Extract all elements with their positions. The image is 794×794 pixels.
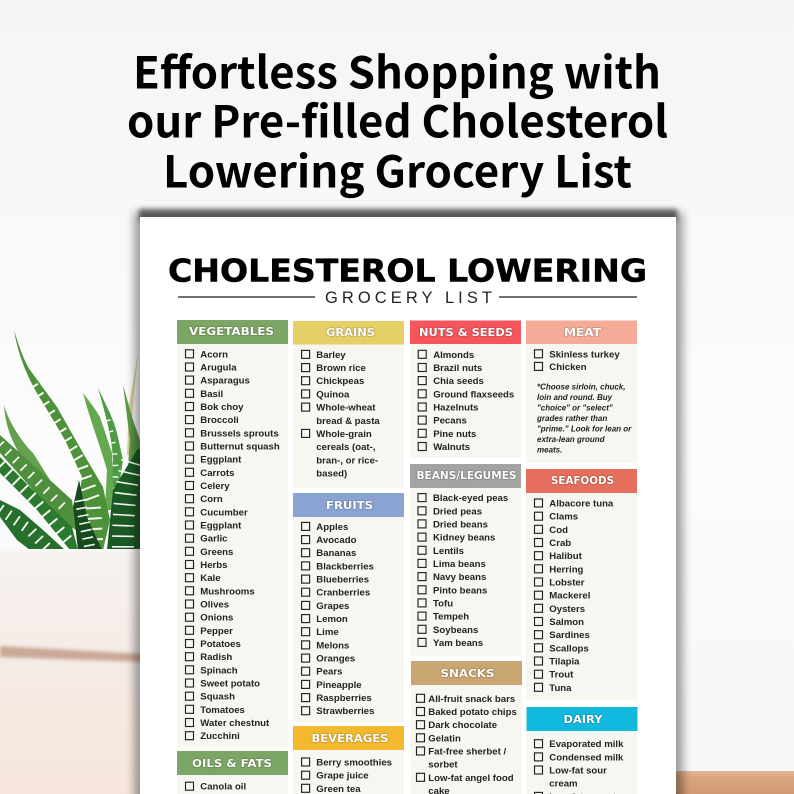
vegetables list: Asparagus — [200, 376, 250, 387]
grains list: bran-, or rice- — [316, 455, 378, 466]
meat buying note: loin and round. Buy — [537, 393, 613, 402]
paper shadow — [134, 209, 683, 794]
vegetables list: Eggplant — [200, 520, 242, 532]
panel: beverages: BEVERAGES — [312, 732, 388, 745]
dairy list: Condensed milk — [549, 752, 624, 763]
panel: oils and fats: OILS & FATS — [192, 757, 272, 770]
fruits list: Pineapple — [316, 680, 362, 691]
nuts list — [418, 350, 514, 453]
vegetables list: Broccoli — [200, 415, 239, 426]
panel: beverages — [293, 726, 404, 794]
seafoods list: Salmon — [549, 617, 584, 628]
vegetables list: Butternut squash — [200, 442, 280, 452]
fruits list: Apples — [316, 522, 348, 533]
seafoods list: Mackerel — [549, 591, 590, 602]
meat buying note: *Choose sirloin, chuck, — [537, 382, 625, 392]
vegetables list: Sweet potato — [200, 678, 260, 690]
fruits list: Avocado — [316, 535, 357, 546]
snacks list: Low-fat angel food — [428, 773, 514, 784]
panel: snacks: SNACKS — [440, 667, 494, 680]
dairy list — [534, 739, 624, 794]
seafoods list: Scallops — [549, 643, 589, 654]
vegetables list: Brussels sprouts — [200, 428, 279, 439]
seafoods list: Trout — [549, 670, 574, 681]
vegetables list: Mushrooms — [200, 586, 255, 597]
beans list: Yam beans — [433, 638, 483, 649]
vegetables list: Garlic — [200, 534, 228, 545]
nuts list: Almonds — [433, 350, 474, 361]
snacks list: Dark chocolate — [428, 720, 497, 731]
panel: oils and fats — [177, 751, 288, 794]
beverages list: Grape juice — [316, 771, 369, 782]
fruits list: Lime — [316, 627, 339, 638]
panel: dairy — [526, 707, 638, 794]
seafoods list: Albacore tuna — [549, 498, 614, 510]
vegetables list: Squash — [200, 692, 235, 703]
vegetables list: Cucumber — [200, 507, 248, 518]
panel: snacks — [411, 661, 522, 794]
vegetables list: Bok choy — [200, 402, 244, 413]
meat list: Skinless turkey — [549, 349, 620, 360]
panel: vegetables: VEGETABLES — [189, 325, 274, 338]
seafoods list — [534, 498, 614, 694]
nuts list: Pecans — [433, 416, 467, 427]
fruits list: Blackberries — [316, 561, 374, 572]
meat list: Chicken — [549, 362, 587, 373]
panel: nuts and seeds: NUTS & SEEDS — [419, 326, 513, 339]
dairy list: Low-fat sour — [549, 766, 607, 776]
grains list: Brown rice — [316, 363, 366, 374]
wooden table — [600, 771, 794, 794]
grains list: Whole-grain — [316, 429, 372, 440]
plant — [0, 330, 140, 550]
vegetables list: Celery — [200, 481, 230, 492]
fruits list: Melons — [316, 640, 349, 651]
nuts list: Hazelnuts — [433, 402, 479, 414]
beans list: Dried peas — [433, 506, 482, 517]
beans list: Lentils — [433, 546, 464, 557]
vegetables list: Kale — [200, 573, 221, 584]
seafoods list: Tuna — [549, 683, 572, 694]
vegetables list: Olives — [200, 600, 229, 610]
panel: seafoods — [526, 469, 637, 700]
vegetables list: Pepper — [200, 626, 233, 637]
meat buying note: extra-lean ground — [537, 435, 606, 444]
vegetables list — [186, 349, 280, 742]
snacks list: All-fruit snack bars — [428, 694, 515, 705]
seafoods list: Lobster — [549, 578, 585, 588]
snacks list: Gelatin — [428, 733, 461, 744]
vegetables list: Acorn — [200, 349, 228, 360]
meat buying note: meats. — [537, 446, 562, 454]
snacks list: sorbet — [428, 760, 458, 771]
beans list: Tempeh — [433, 612, 469, 623]
panel: grains: GRAINS — [326, 326, 375, 339]
fruits list: Strawberries — [316, 706, 374, 717]
fruits list: Raspberries — [316, 693, 372, 704]
seafoods list: Herring — [549, 564, 584, 575]
vegetables list: Arugula — [200, 362, 237, 374]
fruits list: Pears — [316, 667, 342, 678]
panel: meat: MEAT — [564, 326, 602, 339]
nuts list: Ground flaxseeds — [433, 389, 514, 400]
page heading: our Pre-filled Cholesterol — [127, 87, 668, 151]
fruits list: Blueberries — [316, 575, 369, 586]
beans list: Dried beans — [433, 519, 488, 530]
seafoods list: Clams — [549, 512, 578, 523]
vegetables list: Eggplant — [200, 455, 242, 466]
oils list: Canola oil — [200, 782, 246, 793]
vegetables list: Corn — [200, 494, 223, 505]
vegetables list: Greens — [200, 547, 233, 558]
grains list — [302, 350, 380, 479]
beans list: Pinto beans — [433, 585, 487, 596]
beans list: Lima beans — [433, 559, 486, 570]
panel: beans and legumes: BEANS/LEGUMES — [416, 469, 516, 482]
beans list — [418, 493, 508, 649]
panel: beans and legumes — [410, 464, 521, 656]
nuts list: Walnuts — [433, 442, 470, 453]
nuts list: Chia seeds — [433, 376, 484, 387]
vegetables list: Potatoes — [200, 639, 241, 650]
seafoods list: Halibut — [549, 551, 583, 562]
beans list: Black-eyed peas — [433, 493, 508, 504]
panel: seafoods: SEAFOODS — [551, 474, 614, 487]
beans list: Kidney beans — [433, 533, 495, 544]
grains list: Whole-wheat — [316, 403, 376, 414]
panel: vegetables — [177, 320, 288, 747]
panel: fruits: FRUITS — [326, 499, 373, 512]
fruits list — [302, 522, 374, 717]
grains list: Barley — [316, 350, 346, 361]
vegetables list: Basil — [200, 389, 223, 400]
nuts list: Pine nuts — [433, 429, 476, 440]
sheet title: CHOLESTEROL LOWERING — [168, 254, 647, 290]
page heading — [127, 38, 668, 201]
fruits list: Lemon — [316, 614, 348, 625]
paper sheet — [140, 217, 676, 794]
beverages list — [302, 758, 392, 794]
panel: meat — [526, 320, 637, 463]
vegetables list: Herbs — [200, 560, 228, 571]
fruits list: Cranberries — [316, 588, 370, 599]
fruits list: Bananas — [316, 548, 356, 559]
beverages list: Berry smoothies — [316, 758, 392, 768]
seafoods list: Tilapia — [549, 656, 580, 668]
seafoods list: Sardines — [549, 630, 590, 641]
vegetables list: Zucchini — [200, 731, 240, 742]
grains list: Quinoa — [316, 389, 350, 400]
dairy list: cream — [549, 779, 578, 790]
snacks list: Baked potato chips — [428, 707, 517, 718]
dairy list: Evaporated milk — [549, 739, 624, 750]
vegetables list: Spinach — [200, 665, 238, 676]
beans list: Soybeans — [433, 625, 478, 636]
grains list: bread & pasta — [316, 416, 380, 427]
panel: grains — [293, 321, 404, 488]
grains list: Chickpeas — [316, 376, 364, 387]
snacks list: Fat-free sherbet / — [428, 746, 506, 758]
fruits list: Oranges — [316, 654, 355, 665]
page heading: Effortless Shopping with — [133, 38, 661, 102]
panel: dairy: DAIRY — [564, 713, 603, 726]
meat buying note: grades rather than — [536, 414, 607, 423]
beans list: Tofu — [433, 598, 453, 609]
snacks list — [416, 694, 517, 794]
seafoods list: Crab — [549, 538, 571, 549]
panel: fruits — [293, 493, 404, 722]
grains list: based) — [316, 468, 347, 479]
sheet subtitle: GROCERY LIST — [325, 289, 492, 307]
vegetables list: Radish — [200, 652, 232, 663]
grains list: cereals (oat-, — [316, 442, 376, 453]
page heading: Lowering Grocery List — [163, 137, 632, 201]
fruits list: Grapes — [316, 601, 349, 612]
meat buying note: "prime." Look for lean or — [537, 424, 632, 434]
seafoods list: Cod — [549, 525, 568, 536]
vegetables list: Tomatoes — [200, 705, 245, 716]
panel: nuts and seeds — [410, 320, 521, 458]
meat list — [534, 349, 620, 373]
meat buying note: "choice" or "select" — [537, 404, 613, 412]
vegetables list: Carrots — [200, 468, 234, 479]
pot — [0, 549, 145, 794]
vegetables list: Water chestnut — [200, 718, 270, 729]
beans list: Navy beans — [433, 572, 486, 583]
seafoods list: Oysters — [549, 604, 585, 615]
meat buying note — [536, 382, 632, 454]
nuts list: Brazil nuts — [433, 363, 482, 374]
vegetables list: Onions — [200, 613, 233, 624]
